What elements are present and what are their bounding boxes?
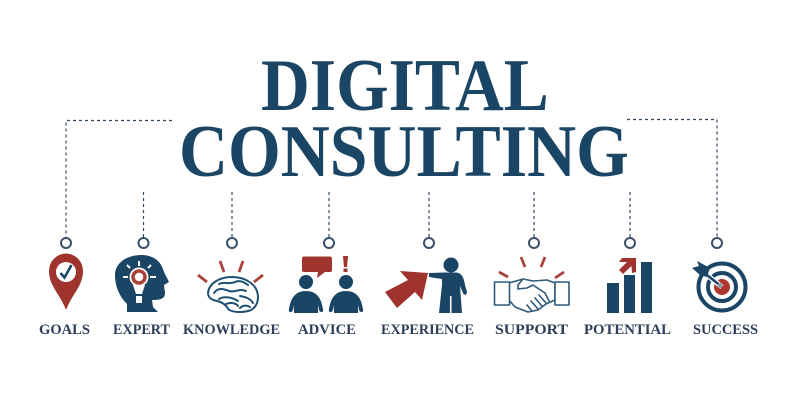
connector: success: [627, 120, 722, 248]
icon: location pin with check: [49, 254, 83, 310]
connector: support: [529, 192, 539, 248]
advice column: [289, 192, 363, 338]
label: knowledge: KNOWLEDGE: [183, 322, 280, 338]
icon: growth arrow: [619, 258, 636, 274]
label: advice: ADVICE: [298, 322, 356, 338]
icon: target with dart: [692, 261, 746, 310]
icon: head with light bulb: [115, 255, 169, 312]
icon: rising bars: [607, 262, 652, 313]
connector: advice: [324, 192, 334, 248]
label: experience: EXPERIENCE: [381, 322, 474, 338]
icon: brain with rays: [198, 261, 263, 312]
label: success: SUCCESS: [693, 322, 758, 338]
connector: experience: [424, 192, 434, 248]
icon: handshake: [494, 257, 569, 312]
connector: potential: [625, 192, 635, 248]
icon: pointing person: [429, 258, 467, 313]
title: CONSULTING: CONSULTING: [179, 111, 629, 193]
success column: [627, 120, 758, 338]
icon: two people: [289, 275, 363, 313]
connector: goals: [61, 120, 172, 248]
potential column: [584, 192, 671, 338]
knowledge column: [183, 192, 280, 338]
goals column: [39, 120, 172, 338]
label: goals: GOALS: [39, 322, 90, 338]
icon: red arrow: [385, 271, 428, 308]
icon: speech bubble: [302, 256, 332, 278]
connector: knowledge: [227, 192, 237, 248]
label: support: SUPPORT: [495, 322, 568, 338]
label: expert: EXPERT: [113, 322, 170, 338]
title: DIGITAL: DIGITAL: [261, 45, 549, 127]
connector: expert: [138, 192, 148, 248]
expert column: [113, 192, 170, 338]
label: potential: POTENTIAL: [584, 322, 671, 338]
experience column: [381, 192, 474, 338]
support column: [494, 192, 569, 338]
icon: exclamation mark: [343, 256, 348, 272]
